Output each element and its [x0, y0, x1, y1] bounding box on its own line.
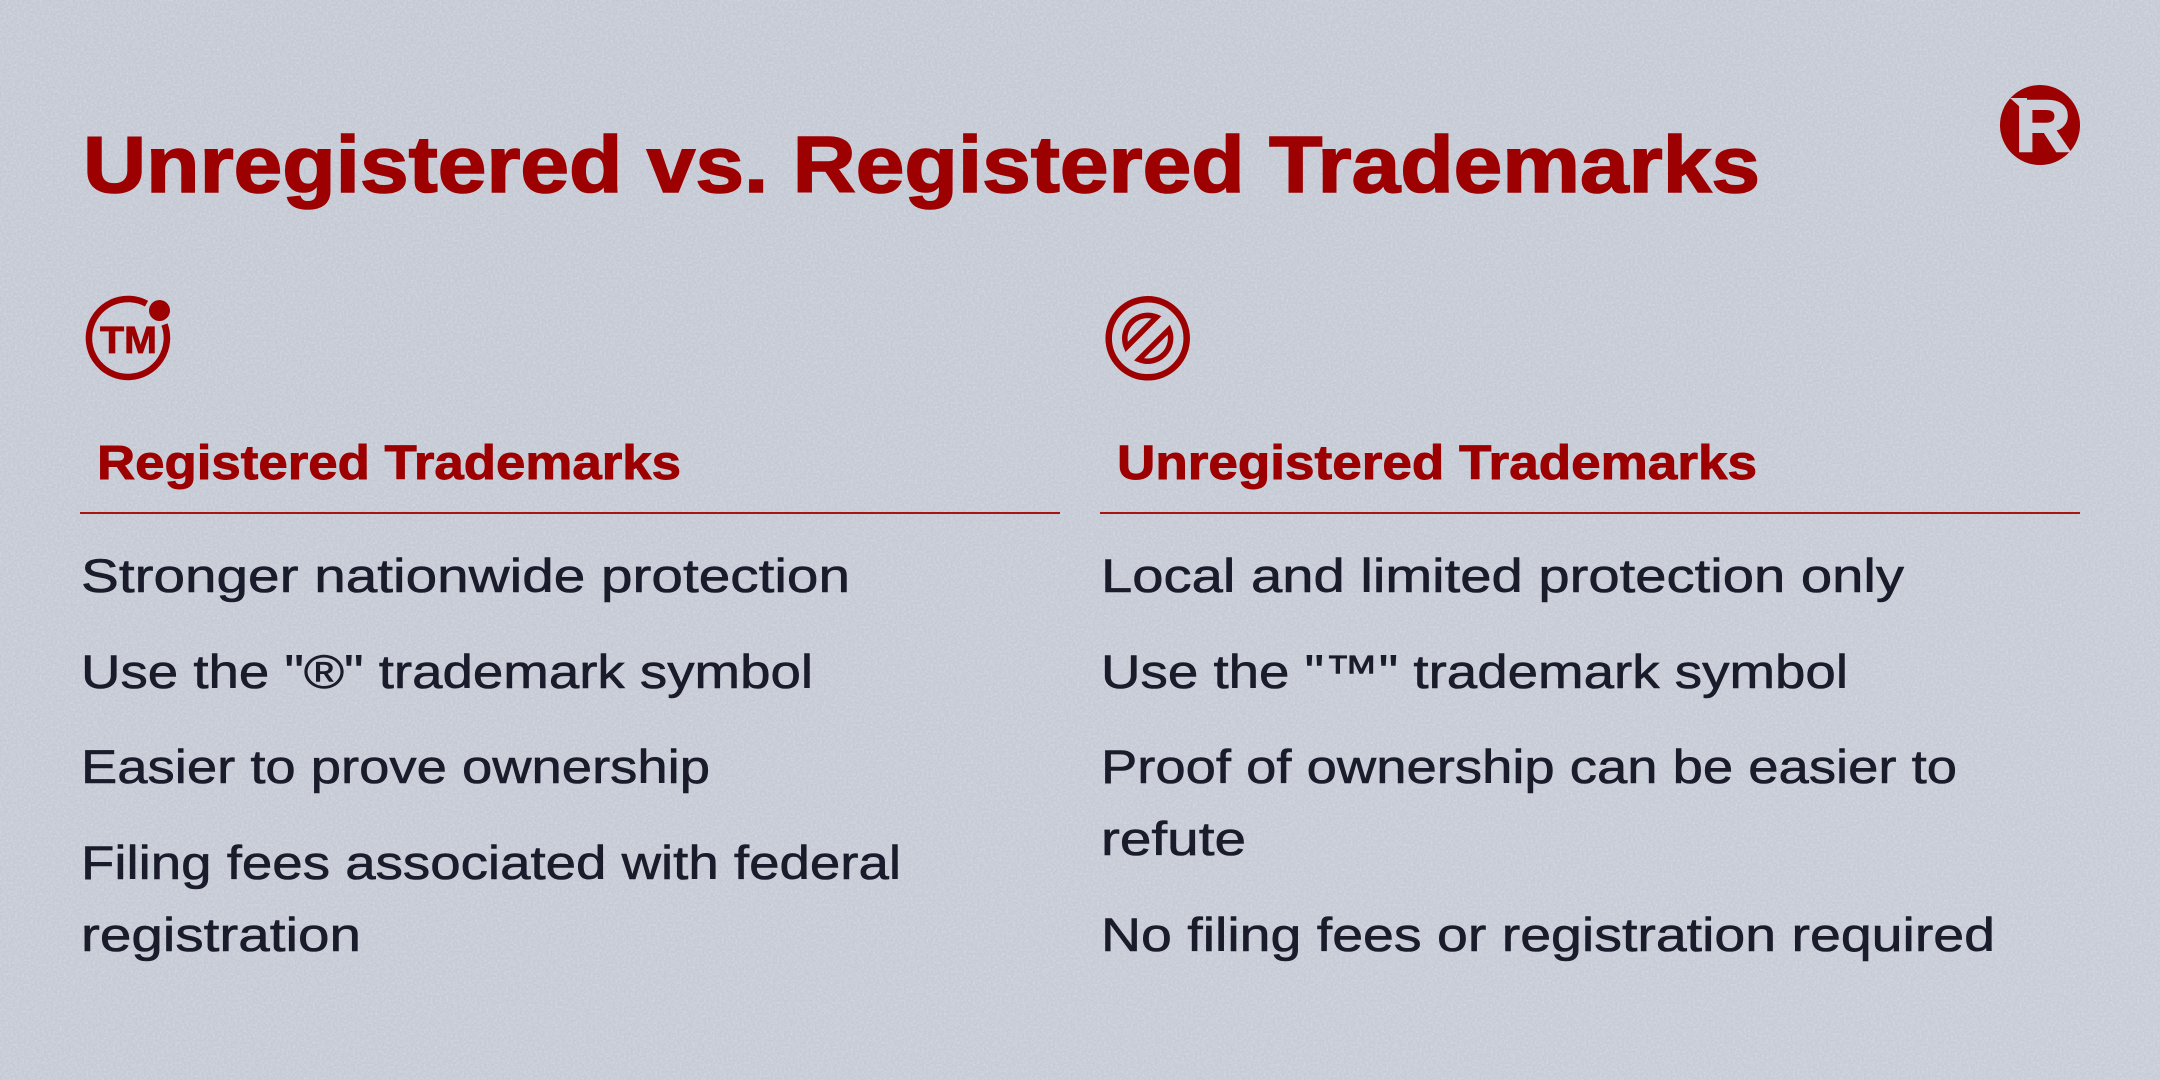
icon: company logo: R [2015, 86, 2071, 167]
text: unregistered limitations list: No filing fees or registration required [1101, 908, 1995, 961]
text: registered benefits list: Easier to prove ownership [81, 740, 710, 793]
text: unregistered limitations list [1101, 549, 1995, 961]
icon: TM symbol: TM [100, 320, 157, 362]
panel: registered trademarks [80, 299, 1060, 961]
panel: unregistered trademarks [1100, 299, 2080, 961]
text: registered benefits list: Stronger nationwide protection [81, 549, 850, 602]
heading: registered trademarks: Registered Trademarks [97, 437, 681, 490]
text: registered benefits list: Filing fees associated with federal [81, 836, 901, 889]
icon: company logo [2000, 85, 2080, 167]
text: unregistered limitations list: Proof of ownership can be easier to [1101, 740, 1957, 793]
text: unregistered limitations list: refute [1101, 812, 1246, 865]
heading: unregistered trademarks: Unregistered Trademarks [1117, 437, 1757, 490]
text: registered benefits list [81, 549, 901, 961]
icon: prohibited symbol [1109, 299, 1187, 377]
text: unregistered limitations list: Use the "™" trademark symbol [1101, 645, 1848, 698]
title: Unregistered vs. Registered Trademarks [83, 120, 1760, 209]
text: unregistered limitations list: Local and limited protection only [1101, 549, 1905, 602]
text: registered benefits list: registration [81, 908, 361, 961]
text: registered benefits list: Use the "®" trademark symbol [81, 645, 813, 698]
icon: TM symbol [89, 299, 170, 377]
